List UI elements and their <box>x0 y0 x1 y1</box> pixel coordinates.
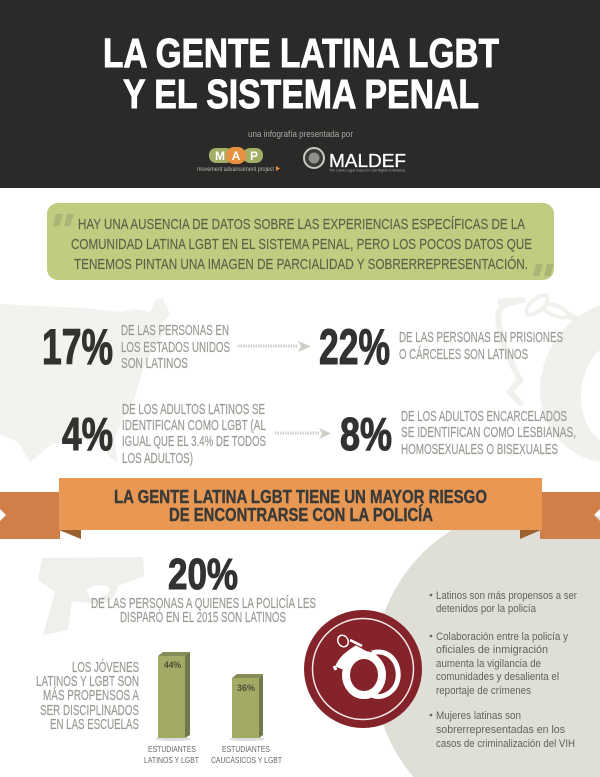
background: map silhouette <box>0 298 170 462</box>
stat: 22% <box>319 319 563 375</box>
bullet 3 <box>430 710 575 750</box>
stat: 8%: 8% <box>340 408 392 460</box>
bullet 2: aumenta la vigilancia de <box>436 658 541 670</box>
bar: 36%: 36% <box>237 683 255 693</box>
bullet 1: Latinos son más propensos a ser <box>436 590 577 602</box>
title: Y EL SISTEMA PENAL <box>123 71 479 117</box>
stat: 20%: DISPARÓ EN EL 2015 SON LATINOS <box>120 609 286 626</box>
quote text <box>71 216 532 273</box>
stat: 4%: IGUAL QUE EL 3.4% DE TODOS <box>122 434 266 450</box>
header panel <box>0 0 600 188</box>
background: grey circle <box>374 505 600 777</box>
logo: MAP: P <box>250 149 258 163</box>
arrow: 17% to 22% <box>238 341 311 352</box>
text: youth discipline: EN LAS ESCUELAS <box>50 717 139 733</box>
bullet list <box>430 590 577 750</box>
stat: 17%: SON LATINOS <box>121 356 188 372</box>
stat: 22%: O CÁRCELES SON LATINOS <box>399 346 528 363</box>
stat: 4% <box>62 402 266 467</box>
bullet 3: sobrerrepresentadas en los <box>436 724 565 736</box>
banner <box>0 478 600 539</box>
axis labels: CAUCÁSICOS Y LGBT <box>211 755 282 765</box>
bullet 1: detenidos por la policía <box>436 603 537 615</box>
arrow: 4% to 8% <box>275 428 331 439</box>
stat: 20% <box>91 550 316 626</box>
bullet 3: Mujeres latinas son <box>436 710 521 722</box>
logo: MAP: movement advancement project <box>197 167 274 173</box>
icon: gun silhouette <box>38 557 144 635</box>
stat: 17% <box>42 319 230 375</box>
text: youth discipline: LATINOS Y LGBT SON <box>36 674 139 690</box>
banner face <box>59 478 542 530</box>
bullet 1 <box>430 590 577 615</box>
logo: MALDEF: MALDEF <box>329 151 406 171</box>
banner heading: DE ENCONTRARSE CON LA POLICÍA <box>169 504 433 525</box>
axis labels: ESTUDIANTES <box>148 744 196 754</box>
stat: 17%: 17% <box>42 319 113 375</box>
stat: 20%: 20% <box>168 550 238 599</box>
axis labels: ESTUDIANTES <box>222 744 270 754</box>
bullet 2: oficiales de inmigración <box>436 644 548 656</box>
presented by: una infografía presentada por <box>248 129 353 139</box>
stat: 17%: DE LAS PERSONAS EN <box>121 323 229 339</box>
closing quote marks <box>533 264 554 276</box>
bullet 2 <box>430 631 568 697</box>
stat: 22%: 22% <box>319 319 390 375</box>
text: youth discipline: MÁS PROPENSOS A <box>43 687 139 704</box>
stat: 17%: LOS ESTADOS UNIDOS <box>121 340 230 356</box>
title <box>103 30 499 117</box>
bar chart <box>144 652 282 765</box>
bullet 2: reportaje de crímenes <box>436 685 531 697</box>
logo: MAP: M <box>215 149 225 163</box>
bar: 44%: 44% <box>164 660 181 670</box>
text: youth discipline <box>36 659 139 733</box>
quote panel <box>47 203 554 280</box>
stat: 4%: 4% <box>62 408 113 460</box>
bullet 2: comunidades y desalienta el <box>436 671 559 683</box>
bullet 3: casos de criminalización del VIH <box>436 738 575 750</box>
stat: 20%: DE LAS PERSONAS A QUIENES LA POLICÍA LES <box>91 595 316 612</box>
background: handcuff and chain <box>498 292 600 462</box>
logo: MAP <box>197 147 280 173</box>
banner heading: LA GENTE LATINA LGBT TIENE UN MAYOR RIESGO <box>114 487 487 507</box>
stat: 4%: IDENTIFICAN COMO LGBT (AL <box>122 418 266 434</box>
banner tails <box>0 492 60 539</box>
axis labels: LATINOS Y LGBT <box>144 755 199 765</box>
stat: 8% <box>340 408 576 460</box>
opening quote marks <box>53 214 74 226</box>
banner heading <box>114 487 487 525</box>
logo: MALDEF <box>304 148 406 172</box>
stat: 4%: DE LOS ADULTOS LATINOS SE <box>122 402 265 418</box>
title: LA GENTE LATINA LGBT <box>103 30 499 76</box>
logo: MALDEF: The Latino Legal Voice for Civil Rights in America <box>329 168 406 172</box>
text: youth discipline: SER DISCIPLINADOS <box>40 703 139 719</box>
bullet 2: Colaboración entre la policía y <box>436 631 568 643</box>
stat: 4%: LOS ADULTOS) <box>122 451 193 467</box>
icon: handcuffs in red circle <box>304 610 422 728</box>
text: youth discipline: LOS JÓVENES <box>72 659 139 676</box>
logo: MAP: A <box>232 149 241 163</box>
axis labels <box>144 744 282 765</box>
